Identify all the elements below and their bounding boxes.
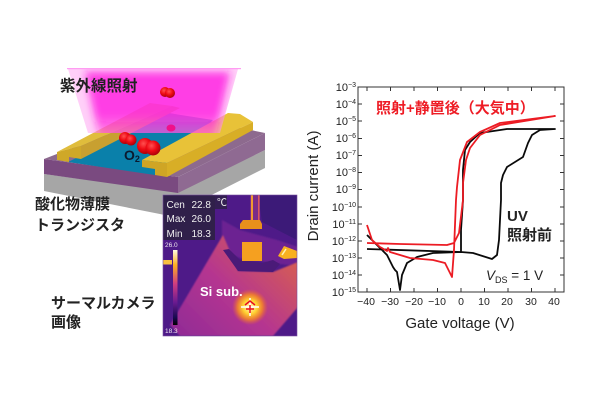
y axis tick labels: −8 (348, 167, 356, 174)
x axis tick labels: 30 (525, 296, 537, 308)
x axis tick labels: 10 (478, 296, 490, 308)
y axis tick labels: −7 (348, 150, 356, 157)
right gold electrode (142, 113, 253, 177)
unit panel (215, 195, 227, 209)
left gold electrode (57, 103, 180, 162)
x axis tick labels: −10 (428, 296, 446, 308)
label: thermal camera image: 画像 (51, 314, 81, 331)
colour scale bar (165, 242, 178, 335)
y axis tick labels: 10 (332, 236, 344, 248)
y axis tick labels: 10 (336, 133, 348, 145)
label: thermal camera image (51, 295, 156, 331)
red label: 照射+静置後（大気中） (376, 99, 535, 117)
thermal image border (163, 195, 297, 336)
transistor device illustration (44, 68, 265, 216)
y axis tick labels: −6 (348, 133, 356, 140)
y axis tick labels: 10 (332, 202, 344, 214)
x axis tick labels: 20 (501, 296, 513, 308)
label: ultraviolet irradiation: 紫外線照射 (60, 76, 138, 95)
UV before irradiation label: UV (507, 208, 528, 225)
y axis tick labels: 10 (332, 253, 344, 265)
UV before irradiation label: 照射前 (507, 226, 552, 244)
y axis tick labels: 10 (332, 270, 344, 282)
readout panel (163, 195, 215, 240)
clip highlight (282, 249, 286, 255)
temperature readout: 22.8 (192, 200, 211, 211)
black curve: before UV (367, 129, 555, 290)
pink molecule on channel (166, 124, 176, 132)
ultraviolet light beam (68, 69, 238, 133)
y axis tick labels: 10 (336, 150, 348, 162)
dark slot in holder (223, 249, 280, 272)
y axis tick labels: −3 (348, 82, 356, 89)
temperature readout: 18.3 (192, 229, 211, 240)
label: oxide thin film transistor: トランジスタ (35, 217, 125, 234)
oxygen molecule in beam (160, 87, 175, 98)
y axis title: Drain current (A) (305, 131, 322, 241)
y axis tick labels: −15 (344, 287, 356, 294)
oxygen molecule small (119, 132, 136, 146)
y axis tick labels: 10 (336, 184, 348, 196)
grey silicon substrate (44, 150, 265, 216)
rod second highlight (258, 195, 260, 222)
y axis tick labels: 10 (332, 287, 344, 299)
VDS label: = 1 V (508, 268, 543, 283)
oxygen molecule large (137, 138, 160, 156)
y axis tick labels: 10 (336, 167, 348, 179)
y axis tick labels: 10 (336, 116, 348, 128)
pale beam halo (60, 69, 245, 133)
y axis tick labels: 10 (332, 219, 345, 231)
x axis tick labels (357, 296, 560, 308)
bright beam core (80, 69, 235, 133)
O2 label: O (124, 147, 135, 163)
temperature readout: Cen (166, 200, 185, 211)
y axis tick labels: −10 (344, 202, 356, 209)
purple insulator layer (44, 112, 265, 193)
red curve: after irradiation and rest (367, 116, 555, 277)
y axis tick labels: 10 (336, 82, 348, 94)
colour scale bar: 26.0 (165, 242, 178, 249)
VDS label: V (486, 268, 497, 283)
teal oxide channel (68, 113, 213, 175)
temperature readout: Min (166, 229, 183, 240)
crosshair marker (241, 298, 259, 316)
y axis tick labels: −12 (344, 236, 356, 243)
x axis tick labels: −30 (381, 296, 399, 308)
silicon substrate surface (170, 235, 298, 336)
thermal background (163, 195, 297, 336)
y axis tick labels: −14 (344, 270, 356, 277)
y axis tick labels: −4 (348, 99, 356, 106)
beam top edge line (67, 68, 241, 69)
plot frame and ticks (358, 87, 564, 292)
x axis tick labels: 40 (548, 296, 560, 308)
colour scale bar: 18.3 (165, 328, 178, 335)
x axis tick labels: −20 (405, 296, 423, 308)
support rod (250, 195, 260, 222)
x axis title: Gate voltage (V) (405, 315, 515, 332)
Si substrate label: Si sub. (200, 284, 243, 299)
x axis tick labels: 0 (458, 296, 464, 308)
transfer characteristics chart (305, 82, 564, 332)
label: oxide thin film transistor (35, 195, 125, 234)
thermal camera image (163, 195, 298, 336)
x axis tick labels: −40 (357, 296, 375, 308)
holder arm (222, 220, 298, 266)
y axis tick labels: 10 (336, 99, 348, 111)
y axis tick labels: −9 (348, 184, 356, 191)
heated block (242, 242, 262, 261)
y axis tick labels: −13 (344, 253, 356, 260)
right dark wall (258, 195, 297, 240)
O2 label: 2 (135, 154, 140, 164)
label: oxide thin film transistor: 酸化物薄膜 (35, 195, 110, 213)
UV before irradiation label (507, 208, 552, 244)
right metal clip (278, 246, 297, 259)
rod highlight (251, 195, 253, 222)
temperature readout: ℃ (217, 198, 227, 209)
label: thermal camera image: サーマルカメラ (51, 295, 156, 312)
temperature readout: 26.0 (192, 214, 211, 225)
temperature readout: Max (166, 214, 185, 225)
left metal clip (163, 260, 172, 264)
y axis tick labels: −11 (345, 219, 356, 226)
VDS label: DS (495, 275, 508, 285)
y axis tick labels (332, 82, 356, 299)
y axis tick labels: −5 (348, 116, 356, 123)
rod base (240, 220, 262, 229)
temperature readout (166, 198, 227, 240)
hot spot (232, 289, 268, 325)
